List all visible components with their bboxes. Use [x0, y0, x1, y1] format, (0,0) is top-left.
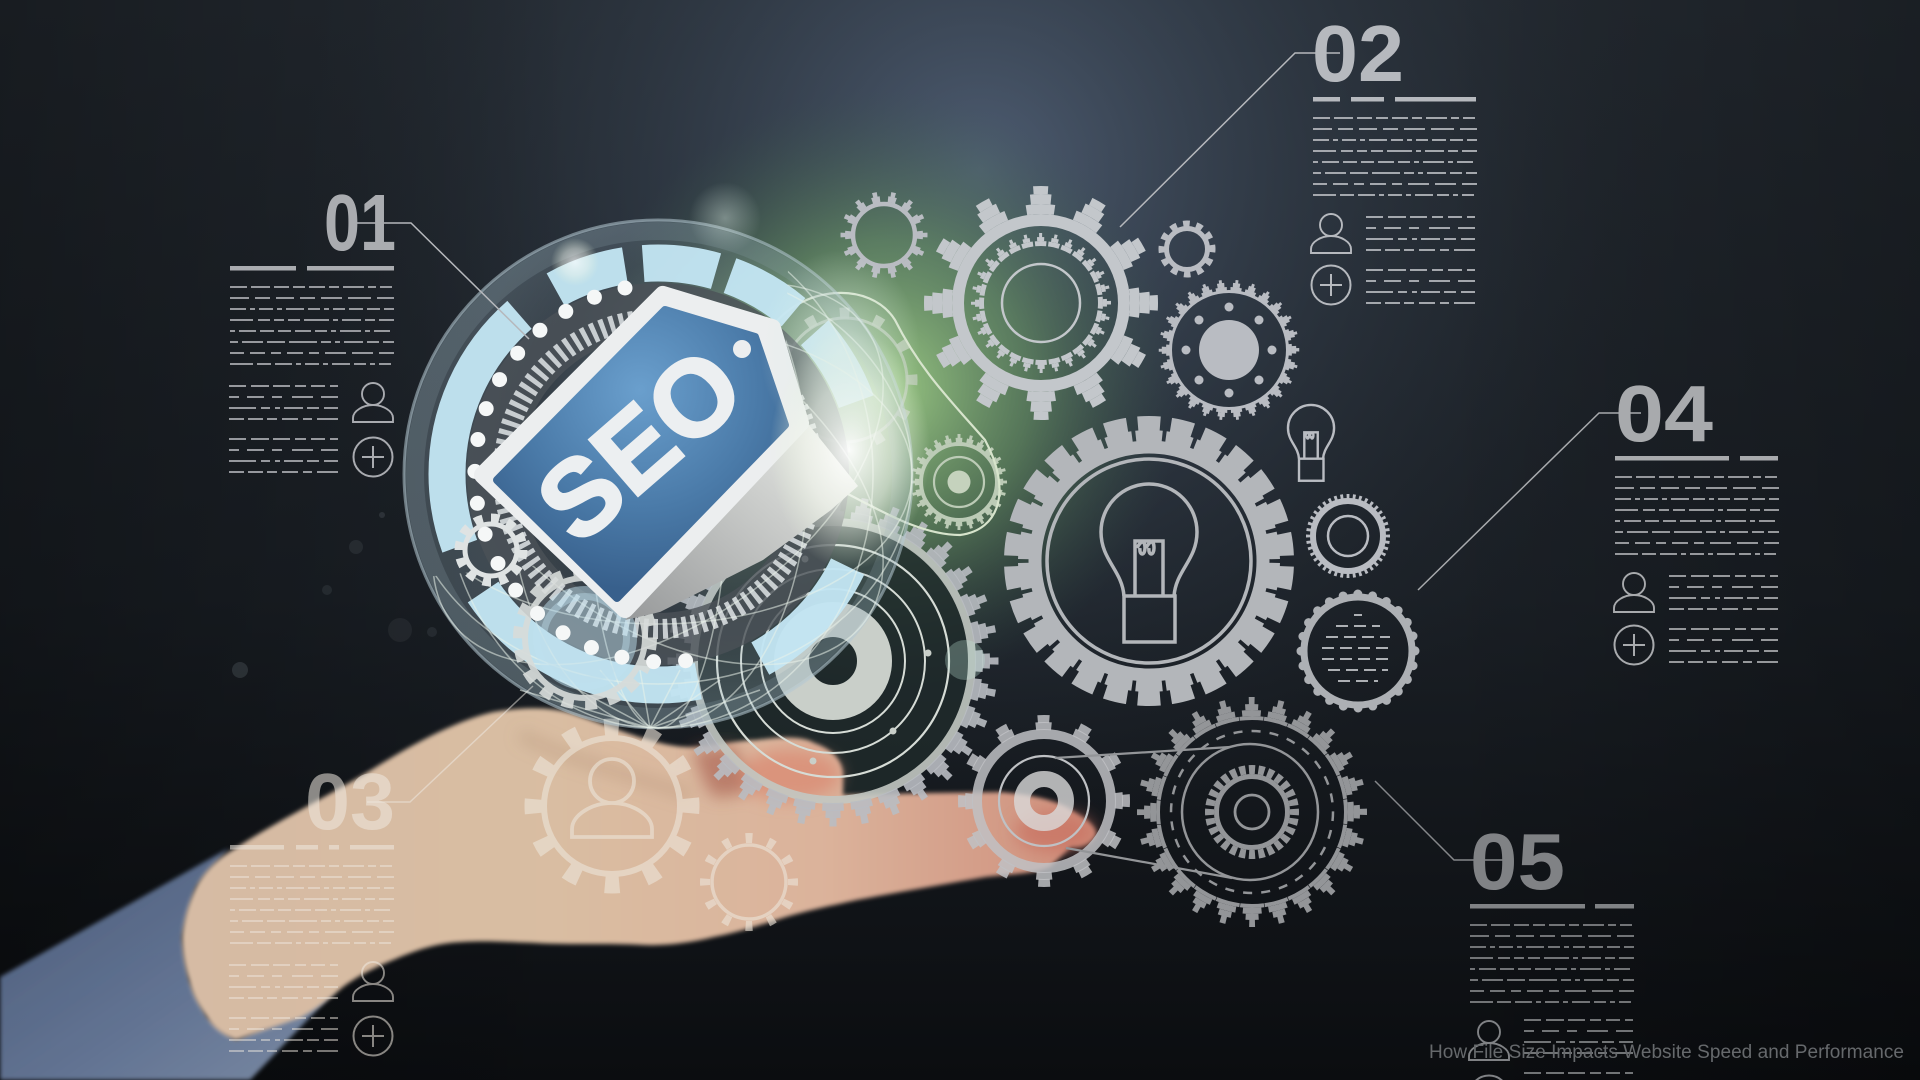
icon: small light bulb	[1288, 405, 1334, 481]
text lines short	[229, 1018, 338, 1051]
SEO tag: SEO	[514, 324, 765, 565]
heading bars	[1470, 904, 1634, 908]
gears drawn on the hand	[534, 728, 793, 926]
text lines	[230, 287, 394, 364]
dotted ring	[475, 288, 691, 662]
icon: plus	[354, 1016, 392, 1056]
leader line 04	[1418, 413, 1641, 590]
icon: person in gear	[572, 759, 652, 837]
text lines short	[1366, 217, 1475, 250]
leader line 05	[1375, 781, 1504, 860]
green spot top	[689, 182, 761, 254]
leader line 01	[350, 223, 529, 339]
sphere highlight	[770, 330, 930, 570]
belt lines between bottom gears	[1055, 747, 1232, 878]
light spot top	[551, 238, 599, 286]
mechanical ring with ticks	[493, 309, 823, 639]
text lines short	[1524, 1073, 1633, 1080]
icon: person	[353, 383, 393, 422]
SEO tag	[483, 295, 800, 609]
panel 03	[229, 757, 395, 1056]
finger shading	[520, 735, 1095, 852]
number 03: 03	[305, 757, 395, 846]
heading bars	[230, 845, 394, 850]
gear: main top gear	[928, 190, 1154, 416]
text lines	[1615, 477, 1779, 554]
gear: small target gear next to sphere	[913, 436, 1005, 528]
haze on upper right of sphere	[760, 250, 920, 450]
heading bars	[230, 266, 394, 270]
gear: small gear on the palm	[705, 838, 793, 926]
gear: large light bulb gear	[1012, 424, 1286, 698]
gear: gear half hidden by sphere	[778, 313, 912, 447]
gear cluster	[672, 190, 1415, 923]
text lines short	[229, 386, 338, 419]
wire globe lines	[433, 270, 913, 729]
glass sphere	[404, 220, 912, 728]
text lines short	[229, 965, 338, 998]
dark disc of the large target gear	[697, 525, 969, 797]
icon: plus	[1312, 266, 1350, 304]
leader line 03	[367, 686, 533, 802]
belt around the gears	[770, 293, 1000, 535]
tag shadow	[625, 425, 858, 620]
icon: plus	[1614, 626, 1654, 664]
panel 04	[1614, 369, 1779, 664]
panel 01	[229, 178, 396, 476]
icon: large light bulb	[1101, 484, 1197, 642]
gear: bottom right gear with dashed ring	[1141, 701, 1363, 923]
text lines short	[229, 439, 338, 472]
text lines short	[1669, 576, 1778, 609]
number 02: 02	[1312, 9, 1404, 98]
icon: person	[1614, 573, 1654, 612]
gear: scalloped gear with text lines	[1301, 594, 1415, 708]
green glow behind gears	[580, 90, 1180, 690]
floating particles	[232, 512, 985, 680]
gear: fine toothed gear	[1308, 496, 1388, 576]
gear: gear with centre disc and dots	[1160, 282, 1298, 418]
panel 05	[1469, 817, 1634, 1080]
leader line 02	[1120, 53, 1340, 227]
number 04: 04	[1615, 369, 1714, 458]
text lines	[230, 866, 394, 943]
bottom gear in the sphere	[518, 571, 652, 705]
text lines	[1313, 118, 1477, 195]
gear: large target gear behind the hand	[672, 500, 994, 822]
icon: plus	[1470, 1076, 1508, 1080]
panel 02	[1311, 9, 1477, 304]
heading bars	[1615, 456, 1778, 460]
gears over the green glow	[770, 293, 1005, 535]
number 01: 01	[324, 178, 396, 267]
sphere with SEO tag	[402, 186, 926, 730]
number 05: 05	[1470, 817, 1565, 906]
hand shape	[182, 708, 1096, 1040]
text lines	[1470, 925, 1634, 1002]
caption: How File Size Impacts Website Speed and Performance	[1429, 1042, 1904, 1063]
gear: person gear	[534, 728, 690, 884]
gear: tiny top gear	[1162, 224, 1212, 274]
heading bars	[1313, 97, 1476, 102]
icon: plus	[354, 438, 392, 476]
text lines short	[1366, 270, 1475, 303]
icon: person	[353, 962, 393, 1001]
gear: small gear top left	[843, 194, 925, 276]
gear: gear with target on the fingertip	[962, 719, 1126, 883]
text lines short	[1669, 629, 1778, 662]
hand holding the sphere	[0, 708, 1096, 1080]
icon: person	[1311, 214, 1351, 253]
text lines short	[1524, 1020, 1633, 1053]
icon: person	[1469, 1021, 1509, 1060]
shirt sleeve	[0, 848, 336, 1080]
small gear in the sphere	[459, 518, 523, 582]
cyan ring segments	[447, 263, 869, 685]
